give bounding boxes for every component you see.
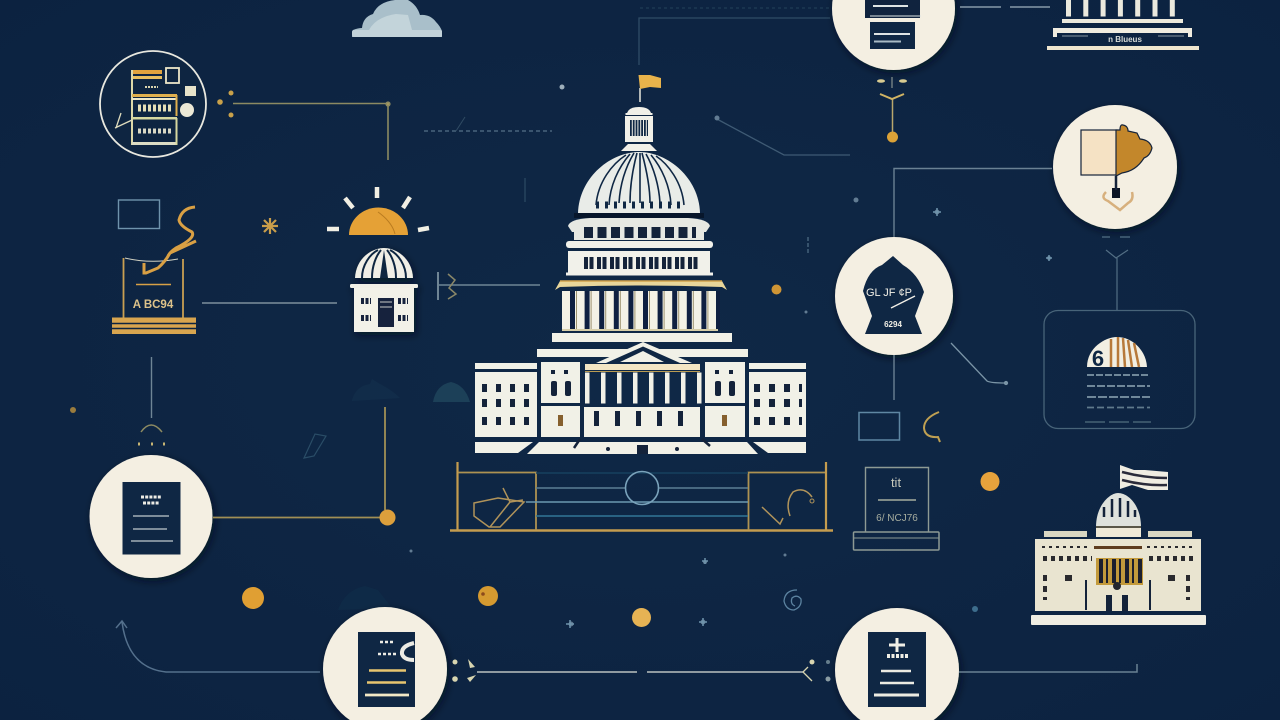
icon: gold sparks	[217, 90, 234, 118]
left wing	[475, 363, 537, 437]
illustration: top right building: n Blueus	[1108, 35, 1142, 44]
connector: map to emblem	[894, 168, 1052, 237]
flag	[638, 75, 661, 102]
portico	[537, 342, 748, 437]
panel: circle emblem	[835, 237, 953, 355]
panel: circle document bottom left	[323, 607, 447, 720]
connector: map to info panel	[1102, 237, 1130, 310]
connector: monument down to circle	[138, 357, 165, 444]
right pavilion	[705, 362, 745, 437]
panel: circle emblem: 6294	[884, 320, 902, 329]
left pavilion	[541, 362, 580, 437]
panel: plaque	[853, 468, 939, 550]
connector: emblem down	[893, 355, 895, 400]
connector: monument to observatory	[202, 302, 337, 304]
panel: circle document bottom right	[835, 608, 959, 720]
panel: circle documents top	[832, 0, 955, 70]
faint background details	[70, 84, 1051, 626]
dot: gold left	[242, 587, 264, 609]
lantern	[621, 107, 657, 151]
dots: gold bottom	[478, 586, 651, 627]
icon: faint leaf	[304, 434, 326, 458]
panel: plaque: 6/ NCJ76	[876, 513, 918, 524]
panel: document circle top left	[100, 51, 206, 157]
flag	[1120, 465, 1168, 490]
icon: faint clouds	[338, 379, 470, 610]
connector: gold elbow with node	[213, 407, 396, 526]
connector: bottom centre line	[452, 659, 830, 682]
icon: striped dome: 6	[1092, 346, 1104, 371]
icon: small spiral	[784, 590, 801, 610]
connector: top left elbow	[233, 102, 390, 160]
dot: gold right	[980, 472, 1000, 491]
arrow: emblem to panel	[951, 343, 1008, 384]
icon: small outlined rectangle	[118, 200, 160, 228]
base steps	[475, 439, 806, 454]
connector: gold pendulum	[877, 77, 907, 142]
connector: top right dashes	[960, 6, 1050, 8]
text lines	[1085, 375, 1151, 422]
panel: circle map	[1053, 105, 1177, 229]
panel: info card	[1044, 310, 1195, 428]
illustration: bottom right capitol	[1031, 465, 1206, 625]
dome	[578, 152, 700, 213]
connector: observatory to capitol	[438, 272, 540, 300]
dot: gold near capitol	[772, 284, 782, 294]
connector: top centre line	[639, 8, 830, 65]
icon: outlined rectangle right	[859, 412, 900, 440]
panel: gold base frame	[450, 462, 833, 530]
arrow: curved return	[116, 621, 320, 672]
icon: top cloud	[352, 0, 442, 37]
panel: gold ballot monument	[112, 207, 196, 334]
illustration: top right building	[1047, 8, 1199, 50]
right wing	[749, 363, 806, 437]
illustration: central capitol	[475, 75, 806, 454]
icon: gold asterisk	[262, 218, 278, 234]
colonnade	[552, 281, 732, 342]
connector: bottom right	[959, 664, 1137, 672]
icon: small sparkles	[566, 208, 1052, 628]
icon: gold curl	[924, 412, 940, 442]
icon: small domed building	[350, 248, 418, 332]
panel: gold ballot monument: A BC94	[133, 299, 174, 311]
icon: rising sun	[327, 187, 429, 235]
icon: striped dome	[1087, 337, 1147, 371]
panel: circle document left	[90, 455, 212, 578]
panel: plaque: tit	[891, 475, 901, 490]
panel: circle emblem: GL JF ¢P	[866, 287, 912, 299]
drum	[566, 213, 713, 276]
